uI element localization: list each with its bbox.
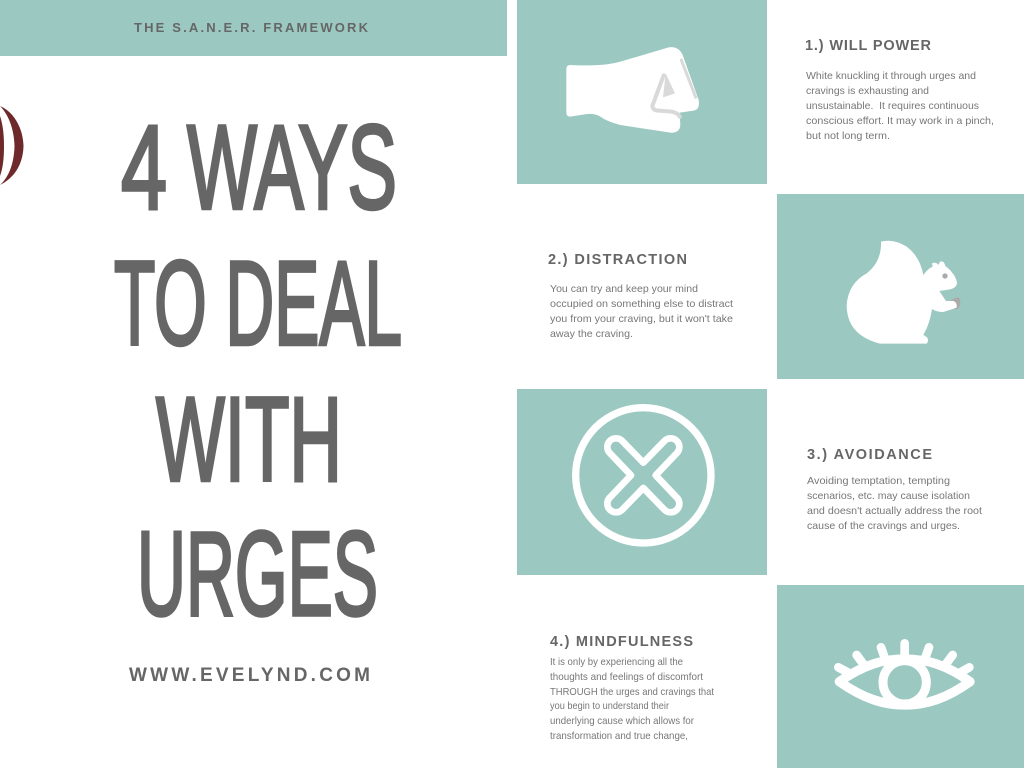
panel: mindfulness text: thoughts and feelings of discomfort xyxy=(550,671,703,683)
panel: mindfulness text: you begin to understand their xyxy=(550,700,669,712)
main title: URGES xyxy=(137,507,378,641)
top banner xyxy=(0,0,507,56)
panel: will power text: conscious effort. It may work in a pinch, xyxy=(806,115,994,127)
panel: will power text: unsustainable. It requires continuous xyxy=(806,100,979,112)
panel: distraction text: you from your craving, but it won't take xyxy=(550,313,733,325)
panel: distraction text: 2.) DISTRACTION xyxy=(548,252,687,268)
main title: TO DEAL xyxy=(114,236,402,370)
main title xyxy=(114,100,402,641)
panel: will power text: but not long term. xyxy=(806,130,890,142)
panel: will power text: cravings is exhausting and xyxy=(806,85,929,97)
panel: mindfulness text: transformation and true change, xyxy=(550,730,688,742)
panel: avoidance icon xyxy=(517,389,767,575)
panel: mindfulness text xyxy=(550,634,714,742)
panel: distraction text: You can try and keep your mind xyxy=(550,283,698,295)
decorative red parenthesis mark xyxy=(0,106,24,185)
icon: eye xyxy=(838,643,970,705)
panel: will power text xyxy=(805,38,994,142)
panel: mindfulness icon xyxy=(777,585,1024,768)
panel: mindfulness text: THROUGH the urges and cravings that xyxy=(550,686,714,698)
main title: 4 xyxy=(121,100,167,234)
main title: WAYS xyxy=(187,100,397,234)
panel: mindfulness text: It is only by experiencing all the xyxy=(550,656,683,668)
panel: avoidance text xyxy=(807,447,982,532)
panel: distraction text: occupied on something else to distract xyxy=(550,298,733,310)
icon: squirrel xyxy=(847,241,960,344)
top banner: THE S.A.N.E.R. FRAMEWORK xyxy=(134,20,369,35)
panel: avoidance text: Avoiding temptation, tempting xyxy=(807,475,950,487)
panel: will power icon xyxy=(517,0,767,184)
panel: mindfulness text: 4.) MINDFULNESS xyxy=(550,634,693,650)
panel: distraction text xyxy=(548,252,733,340)
panel: avoidance text: scenarios, etc. may cause isolation xyxy=(807,490,970,502)
panel: avoidance text: 3.) AVOIDANCE xyxy=(807,447,932,463)
panel: avoidance text: and doesn't actually address the root xyxy=(807,505,982,517)
panel: mindfulness text: underlying cause which allows for xyxy=(550,715,694,727)
panel: distraction text: away the craving. xyxy=(550,328,633,340)
icon: fist xyxy=(566,47,699,133)
panel: distraction icon xyxy=(777,194,1024,379)
icon: crossed circle xyxy=(576,408,711,543)
main title: WITH xyxy=(156,372,342,506)
panel: avoidance text: cause of the cravings and urges. xyxy=(807,520,960,532)
panel: will power text: 1.) WILL POWER xyxy=(805,38,932,54)
website url: WWW.EVELYND.COM xyxy=(129,665,370,686)
panel: will power text: White knuckling it through urges and xyxy=(806,70,976,82)
